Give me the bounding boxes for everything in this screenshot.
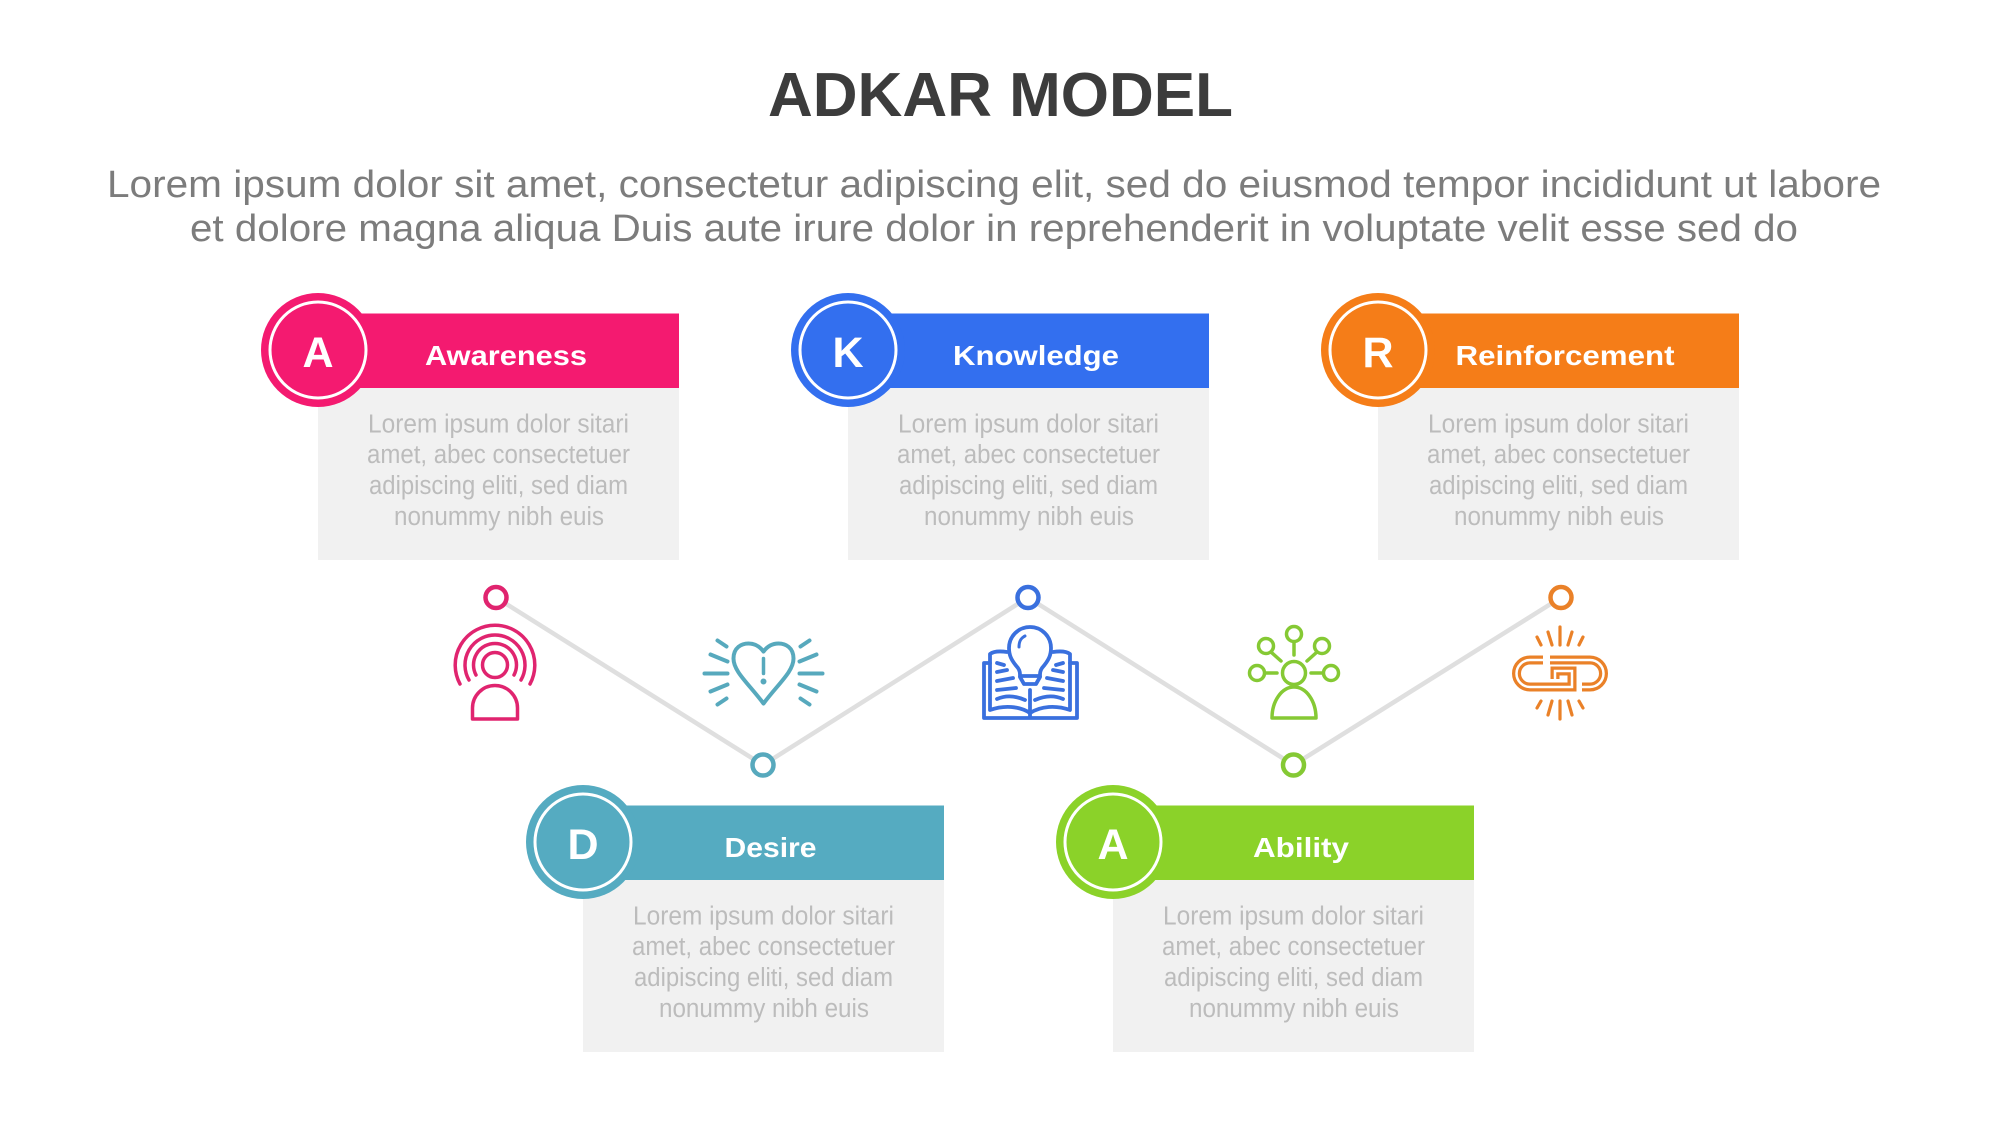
description: nonummy nibh euis xyxy=(1189,995,1399,1023)
icon: knowledge book with bulb xyxy=(984,627,1077,718)
icon: reinforcement chain xyxy=(1516,627,1604,719)
title: ADKAR MODEL xyxy=(768,61,1233,130)
badge circle: A xyxy=(1097,821,1129,869)
description: Lorem ipsum dolor sitari xyxy=(1163,902,1424,930)
description: adipiscing eliti, sed diam xyxy=(634,964,893,992)
description: Lorem ipsum dolor sitari xyxy=(633,902,894,930)
panel background xyxy=(1113,879,1474,1052)
header bar xyxy=(583,806,944,880)
description xyxy=(367,410,630,531)
icon: desire heart xyxy=(704,640,822,704)
panel background xyxy=(583,879,944,1052)
badge circle xyxy=(791,293,905,407)
heading: Awareness xyxy=(425,340,587,371)
description: adipiscing eliti, sed diam xyxy=(1429,472,1688,500)
description xyxy=(1427,410,1690,531)
zigzag connector line xyxy=(496,598,1561,765)
badge circle xyxy=(1321,293,1435,407)
description: adipiscing eliti, sed diam xyxy=(369,472,628,500)
description xyxy=(1162,902,1425,1023)
panel: ability xyxy=(1056,785,1474,1052)
node: desire xyxy=(752,754,774,776)
description: nonummy nibh euis xyxy=(659,995,869,1023)
header bar xyxy=(1378,314,1739,388)
header bar xyxy=(848,314,1209,388)
description xyxy=(632,902,895,1023)
header bar xyxy=(318,314,679,388)
node: reinforcement xyxy=(1550,587,1572,608)
description xyxy=(897,410,1160,531)
badge circle xyxy=(261,293,375,407)
description: Lorem ipsum dolor sitari xyxy=(1428,410,1689,438)
description: amet, abec consectetuer xyxy=(367,441,630,469)
description: Lorem ipsum dolor sitari xyxy=(898,410,1159,438)
panel background xyxy=(1378,387,1739,560)
heading: Desire xyxy=(724,832,816,863)
badge circle: R xyxy=(1362,329,1394,377)
description: nonummy nibh euis xyxy=(394,503,604,531)
heading: Knowledge xyxy=(953,340,1119,371)
icon: ability person with network xyxy=(1250,626,1338,718)
icon: awareness person with signal arcs xyxy=(455,625,535,719)
header bar xyxy=(1113,806,1474,880)
panel: knowledge xyxy=(791,293,1209,560)
panel: desire xyxy=(526,785,944,1052)
description: amet, abec consectetuer xyxy=(897,441,1160,469)
description: adipiscing eliti, sed diam xyxy=(1164,964,1423,992)
description: amet, abec consectetuer xyxy=(1427,441,1690,469)
description: amet, abec consectetuer xyxy=(632,933,895,961)
badge circle: D xyxy=(567,821,599,869)
panel: awareness xyxy=(261,293,679,560)
description: nonummy nibh euis xyxy=(1454,503,1664,531)
node: ability xyxy=(1283,754,1304,776)
badge circle: K xyxy=(832,329,864,377)
badge circle xyxy=(1056,785,1170,899)
description: adipiscing eliti, sed diam xyxy=(899,472,1158,500)
badge circle xyxy=(526,785,640,899)
heading: Ability xyxy=(1253,832,1349,863)
node: awareness xyxy=(486,587,506,608)
subtitle text xyxy=(107,164,1881,250)
badge circle: A xyxy=(302,329,334,377)
description: nonummy nibh euis xyxy=(924,503,1134,531)
heading: Reinforcement xyxy=(1456,340,1674,371)
panel background xyxy=(848,387,1209,560)
node: knowledge xyxy=(1018,587,1038,608)
panel: reinforcement xyxy=(1321,293,1739,560)
description: amet, abec consectetuer xyxy=(1162,933,1425,961)
panel background xyxy=(318,387,679,560)
subtitle text: Lorem ipsum dolor sit amet, consectetur adipiscing elit, sed do eiusmod tempor incididunt ut labore xyxy=(107,164,1881,206)
subtitle text: et dolore magna aliqua Duis aute irure dolor in reprehenderit in voluptate velit esse sed do xyxy=(190,208,1798,250)
description: Lorem ipsum dolor sitari xyxy=(368,410,629,438)
